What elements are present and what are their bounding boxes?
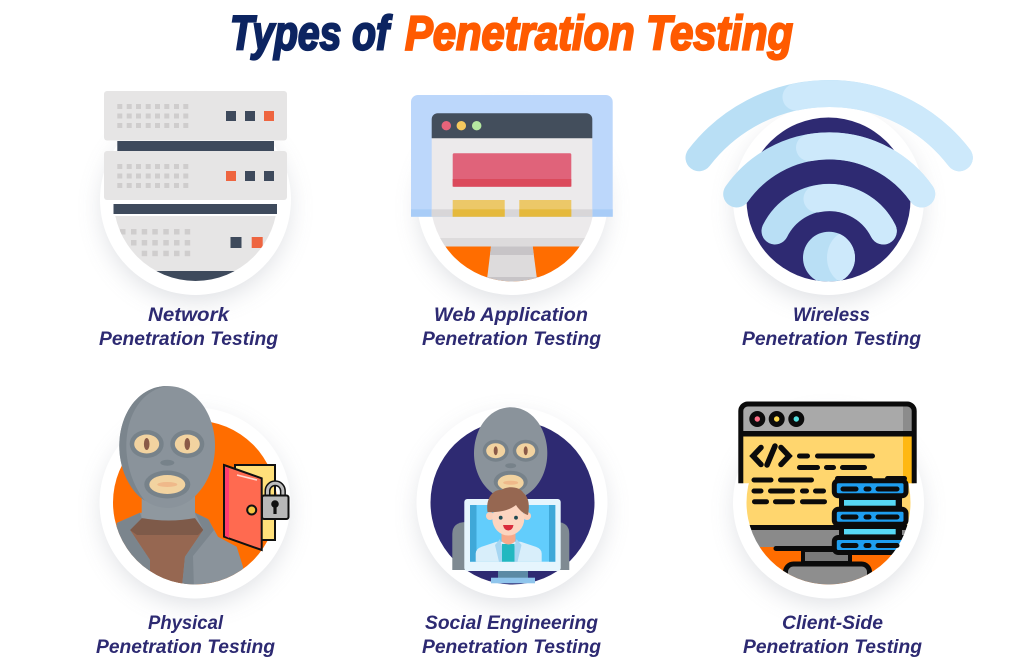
icon: neck (142, 492, 195, 520)
icon: monitor (464, 499, 561, 583)
white ring (417, 104, 608, 295)
icon: wifi inner arc (775, 197, 883, 231)
icon: open door (224, 465, 262, 550)
white ring (733, 104, 924, 295)
icon: door frame (235, 465, 275, 540)
label (96, 613, 275, 658)
icon: top server unit (104, 91, 287, 140)
panel: physical penetration testing (96, 386, 290, 658)
icon: masked attacker head (474, 407, 547, 505)
label: Physical (148, 613, 224, 634)
icon: server dark bars (114, 141, 277, 214)
label: Penetration Testing (742, 329, 921, 350)
panel: network penetration testing (99, 91, 291, 350)
white ring (733, 408, 924, 598)
icon: lower server clipped to circle (116, 216, 276, 281)
icon: person on screen (476, 487, 542, 562)
icon: monitor lower part (432, 217, 592, 282)
label: Penetration Testing (422, 329, 601, 350)
label: Client-Side (782, 613, 883, 634)
icon: blue backdrop (411, 95, 613, 217)
icon: browser window top (740, 404, 915, 483)
white ring (416, 407, 608, 598)
navy disc (430, 420, 594, 584)
circle shadow (736, 116, 920, 300)
icon: balaclava head (119, 386, 215, 508)
circle shadow (103, 419, 287, 603)
title: Types of (230, 8, 392, 60)
white ring (100, 104, 291, 295)
icon: middle server unit (104, 151, 287, 200)
icon: attacker shoulders (452, 522, 569, 570)
title: Penetration Testing (405, 8, 793, 60)
icon: code lines (753, 446, 904, 502)
label (99, 305, 278, 350)
white ring (100, 408, 290, 598)
circle shadow (736, 419, 920, 603)
label (422, 305, 601, 350)
icon: wifi dot (803, 232, 855, 282)
icon: wifi middle arc (737, 146, 922, 194)
label: Penetration Testing (743, 637, 922, 658)
label (742, 305, 921, 350)
circle shadow (420, 116, 604, 300)
icon: browser window (432, 113, 592, 217)
label: Penetration Testing (422, 637, 601, 658)
label: Penetration Testing (96, 637, 275, 658)
label (743, 613, 922, 658)
label (422, 613, 601, 658)
panel: wireless penetration testing (699, 93, 959, 350)
icon: wifi outer arc (699, 93, 959, 158)
panel: client-side penetration testing (733, 404, 924, 658)
icon: padlock (262, 483, 288, 519)
icon: masked figure body (117, 513, 243, 590)
circle shadow (104, 116, 288, 300)
icon: server stack (834, 481, 914, 552)
label: Web Application (434, 305, 588, 326)
circle shadow (420, 419, 604, 603)
label: Penetration Testing (99, 329, 278, 350)
panel: web application penetration testing (411, 95, 613, 350)
orange disc (113, 420, 277, 584)
navy disc (746, 118, 910, 282)
label: Wireless (793, 305, 870, 326)
icon: monitor lower part clipped to circle (746, 483, 910, 584)
panel: social engineering penetration testing (416, 407, 608, 658)
title (230, 8, 793, 60)
label: Network (148, 305, 231, 326)
label: Social Engineering (425, 613, 598, 634)
